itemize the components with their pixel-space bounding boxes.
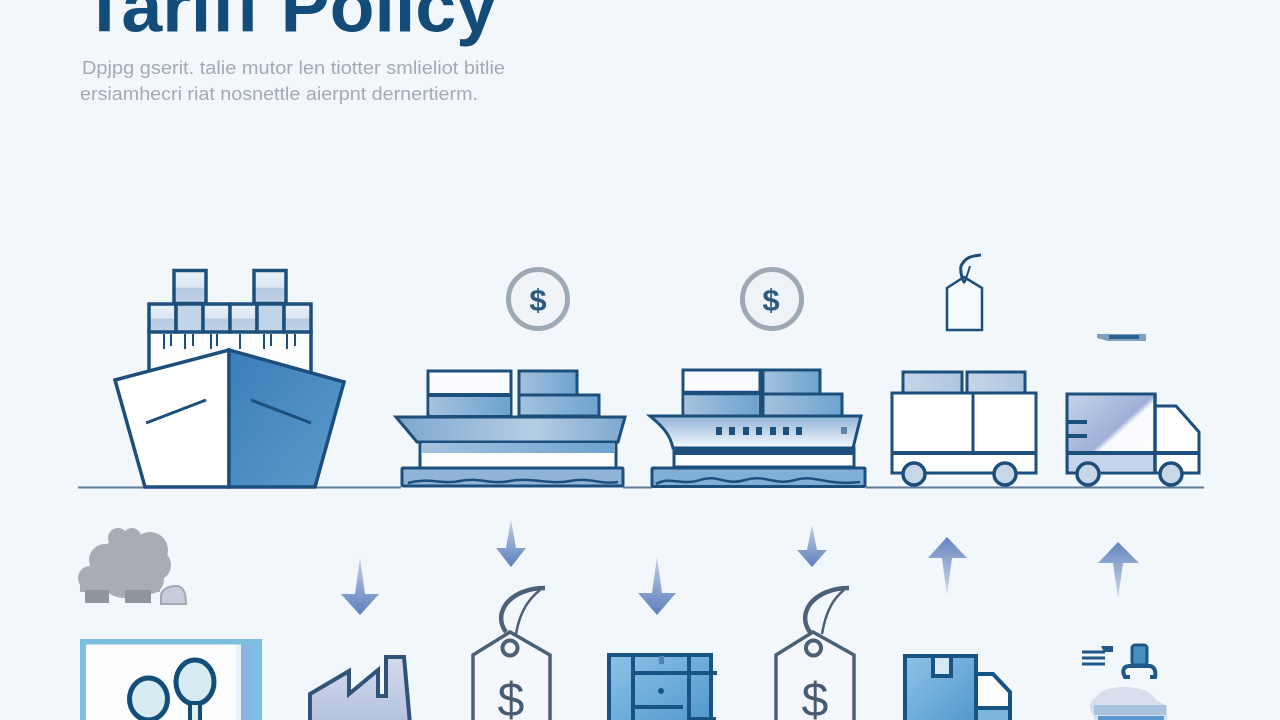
icon: price tag blank: [947, 255, 982, 330]
icon: dollar tag 2: [776, 588, 854, 720]
icon: robot claw and dispenser: [1082, 645, 1167, 720]
arrow: up 1: [928, 537, 967, 595]
icon: large container ship: [115, 270, 344, 487]
icon: dollar coin 2: [742, 270, 802, 328]
icon: cargo ship 2: [650, 370, 865, 486]
icon: cargo ship 1: [396, 371, 625, 486]
arrow: down 4: [797, 525, 827, 567]
icon: dollar coin 1: $: [529, 282, 547, 318]
icon: dollar tag 1: [473, 588, 550, 720]
subtitle text block: ersiamhecri riat nosnettle aierpnt dernertierm.: [80, 83, 478, 104]
subtitle text block: Dpjpg gserit. talie mutor len tiotter smlieliot bitlie: [82, 57, 505, 78]
icon: small truck speed mark: [1097, 334, 1146, 341]
arrow: up 2: [1098, 542, 1139, 599]
arrow: down 3: [638, 557, 676, 615]
subtitle text block: [80, 57, 505, 104]
panel: magnifier card: [80, 639, 262, 720]
icon: factory: [310, 657, 410, 720]
icon: dollar coin 2: $: [762, 282, 780, 318]
icon: dollar coin 1: [508, 270, 568, 328]
icon: parcel truck: [905, 656, 1010, 720]
icon: box truck: [892, 372, 1036, 485]
ground line: [78, 486, 1204, 488]
icon: delivery truck: [1067, 394, 1199, 485]
arrow: down 2: [496, 520, 526, 567]
icon: warehouse box: [609, 655, 717, 720]
icon: grey cloud: [78, 528, 186, 604]
arrow: down 1: [341, 558, 379, 615]
